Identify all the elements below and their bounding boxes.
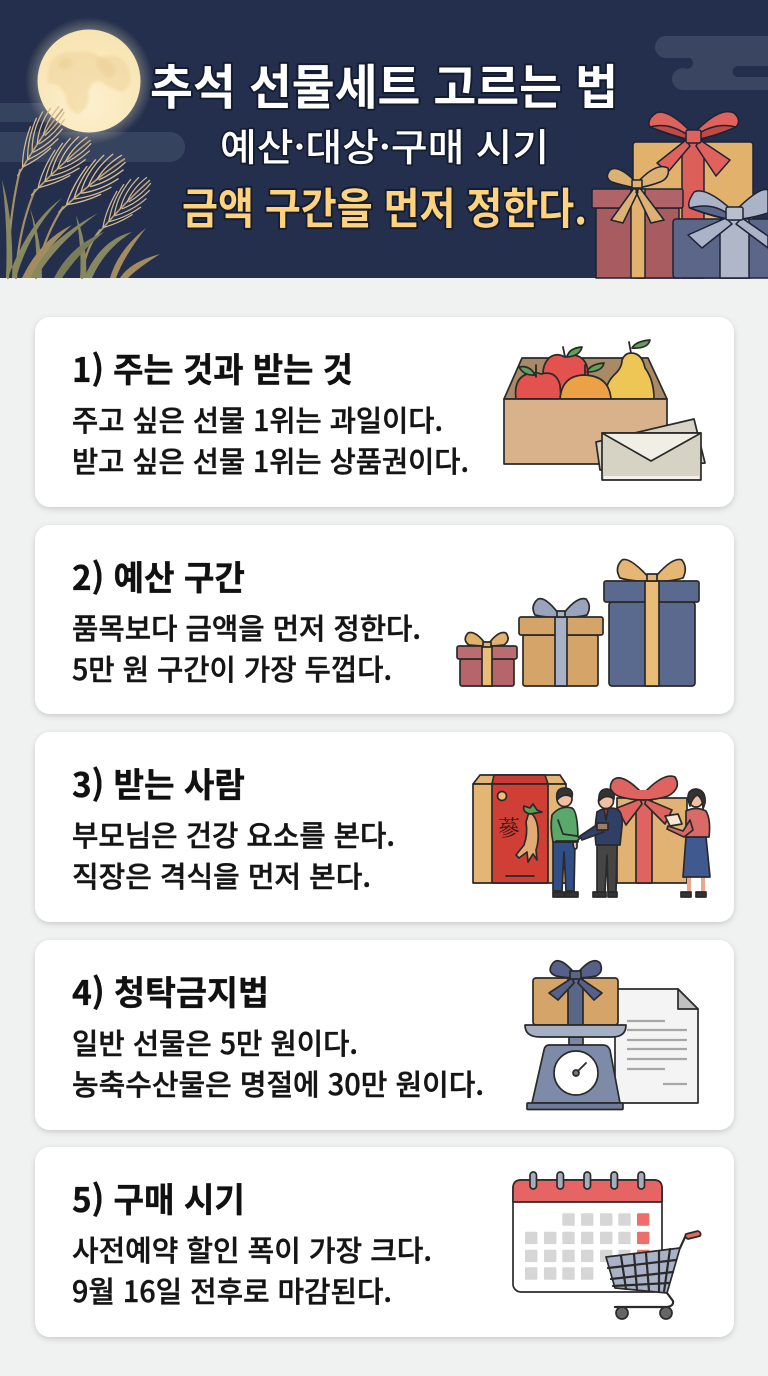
text block 5: 사전예약 할인 폭이 가장 크다. bbox=[72, 1228, 432, 1270]
panel: anti-graft law bbox=[35, 940, 734, 1130]
ginseng box bbox=[473, 775, 566, 883]
medium gift bbox=[519, 599, 603, 686]
heading 1: 1) 주는 것과 받는 것 bbox=[72, 343, 353, 392]
text block 2 bbox=[72, 606, 421, 689]
red gift with gold bow bbox=[592, 167, 683, 278]
ginseng box: 蔘 bbox=[498, 816, 520, 841]
icon: calendar bbox=[513, 1172, 662, 1292]
person: man in suit bbox=[580, 789, 622, 897]
header banner bbox=[0, 0, 768, 278]
text block 1: 받고 싶은 선물 1위는 상품권이다. bbox=[72, 439, 469, 481]
text block 2: 품목보다 금액을 먼저 정한다. bbox=[72, 606, 421, 648]
person: man in green bbox=[551, 788, 580, 897]
text block 3 bbox=[72, 813, 395, 896]
silver grass bbox=[2, 100, 160, 278]
blue gift with silver bow bbox=[673, 189, 768, 278]
gold headline: 금액 구간을 먼저 정한다. bbox=[182, 175, 587, 237]
large gift bbox=[604, 559, 699, 686]
text block 1: 주고 싶은 선물 1위는 과일이다. bbox=[72, 398, 443, 440]
heading 4: 4) 청탁금지법 bbox=[72, 966, 269, 1015]
text block 4 bbox=[72, 1021, 484, 1104]
icon: three gifts by size bbox=[457, 559, 699, 686]
heading 5: 5) 구매 시기 bbox=[72, 1173, 245, 1222]
clouds bbox=[0, 36, 768, 162]
icon: document bbox=[615, 989, 698, 1103]
text block 2: 5만 원 구간이 가장 두껍다. bbox=[72, 647, 392, 689]
text block 4: 농축수산물은 명절에 30만 원이다. bbox=[72, 1062, 484, 1104]
icon: gift on scale bbox=[525, 961, 626, 1110]
text block 3: 부모님은 건강 요소를 본다. bbox=[72, 813, 395, 855]
panel: purchase timing bbox=[35, 1147, 734, 1337]
gift stack bbox=[592, 112, 768, 278]
icon: shopping cart bbox=[606, 1231, 701, 1319]
title: 추석 선물세트 고르는 법 bbox=[150, 48, 618, 118]
panel: recipients bbox=[35, 732, 734, 922]
panel: budget tiers bbox=[35, 525, 734, 714]
large gift bbox=[610, 776, 687, 883]
gold gift with red bow bbox=[633, 112, 753, 278]
icon: fruit box and envelope bbox=[504, 340, 705, 480]
icon: ginseng box and people bbox=[473, 775, 710, 897]
text block 5 bbox=[72, 1228, 432, 1311]
person: woman with clipboard bbox=[665, 789, 710, 897]
heading 3: 3) 받는 사람 bbox=[72, 758, 245, 807]
full moon bbox=[25, 17, 153, 145]
heading 2: 2) 예산 구간 bbox=[72, 551, 245, 600]
subtitle: 예산·대상·구매 시기 bbox=[220, 117, 549, 172]
panel: gift and receive bbox=[35, 317, 734, 507]
small gift bbox=[457, 633, 517, 686]
text block 3: 직장은 격식을 먼저 본다. bbox=[72, 854, 371, 896]
text block 4: 일반 선물은 5만 원이다. bbox=[72, 1021, 358, 1063]
text block 1 bbox=[72, 398, 469, 481]
text block 5: 9월 16일 전후로 마감된다. bbox=[72, 1269, 392, 1311]
